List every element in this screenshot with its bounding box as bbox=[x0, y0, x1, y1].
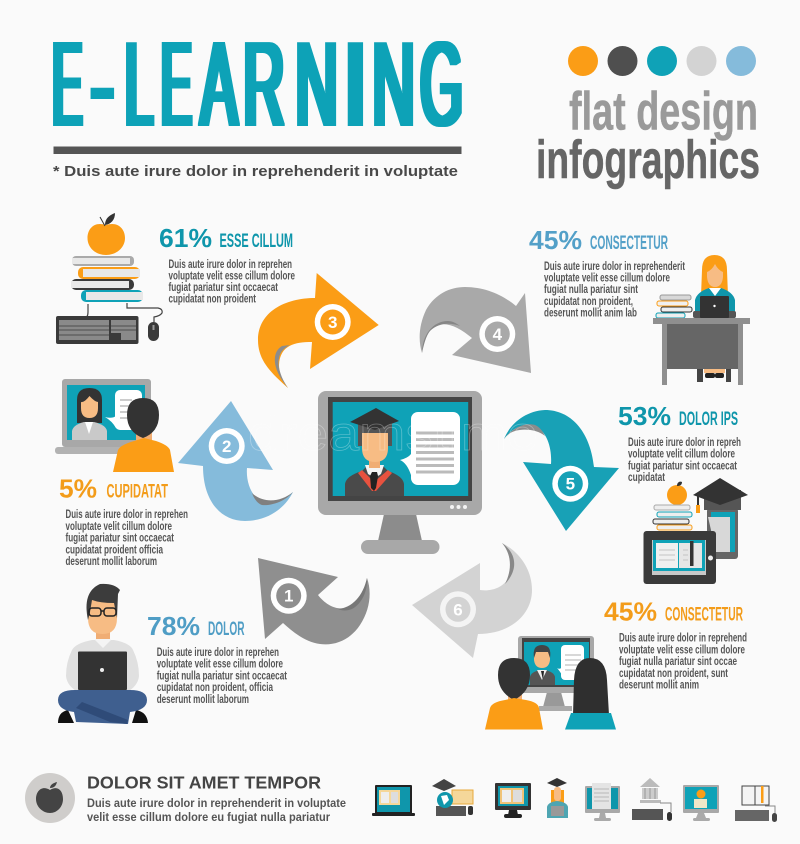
text block: 53% dolor ips: DOLOR IPS bbox=[679, 409, 738, 430]
text block: 53% dolor ips: fugiat pariatur sint occaecat bbox=[628, 458, 737, 472]
text block: 53% dolor ips: voluptate velit cillum dolore bbox=[628, 447, 735, 461]
icon: globe and mortarboard bbox=[432, 779, 473, 816]
arrow 3 bbox=[258, 273, 379, 388]
icon: laptop with book bbox=[372, 785, 415, 816]
text block: 78% dolor: 78% bbox=[147, 611, 200, 641]
text block: 5% cupidatat: Duis aute irure dolor in reprehen bbox=[66, 507, 188, 521]
text block: 61% esse cillum: fugiat pariatur sint occaecat bbox=[168, 280, 278, 294]
footer text: Duis aute irure dolor in reprehenderit in voluptate bbox=[87, 798, 346, 810]
arrow 3: 3 bbox=[328, 313, 337, 332]
footer icon row bbox=[372, 778, 777, 822]
icon: man with laptop bbox=[58, 584, 148, 724]
icon: two students watching a lecture bbox=[485, 636, 616, 730]
text block: 78% dolor: DOLOR bbox=[208, 619, 245, 640]
icon: tablet, books and mortarboard bbox=[644, 478, 748, 584]
text block: 78% dolor: deserunt mollit laborum bbox=[157, 692, 249, 706]
text block: 5% cupidatat: 5% bbox=[59, 474, 97, 504]
text block: 45% consectetur (blue): CONSECTETUR bbox=[590, 233, 668, 254]
arrow 6 bbox=[412, 543, 532, 658]
title: L bbox=[125, 18, 153, 151]
text block: 45% consectetur (orange): 45% bbox=[604, 597, 657, 627]
text block: 61% esse cillum: 61% bbox=[159, 223, 212, 253]
arrow 2: 2 bbox=[222, 437, 231, 456]
text block: 5% cupidatat: deserunt mollit laborum bbox=[66, 554, 157, 568]
icon: monitor with apple and books bbox=[683, 785, 719, 821]
arrow 1 bbox=[258, 558, 370, 644]
text block: 5% cupidatat: cupidatat proident officia bbox=[66, 542, 163, 556]
text block: 45% consectetur (orange): cupidatat non proident, sunt bbox=[619, 666, 728, 680]
text block: 53% dolor ips: Duis aute irure dolor in repreh bbox=[628, 435, 741, 449]
arrow 5: 5 bbox=[566, 475, 575, 494]
title: N bbox=[372, 18, 415, 151]
subtitle: * Duis aute irure dolor in reprehenderit in voluptate bbox=[53, 163, 458, 180]
icon: dark monitor with book bbox=[495, 783, 531, 818]
title: E bbox=[52, 18, 82, 151]
arrow 5 bbox=[504, 410, 619, 531]
text block: 45% consectetur (blue): Duis aute irure dolor in reprehenderit bbox=[544, 259, 685, 273]
graduate figure bbox=[345, 408, 404, 496]
arrow 4: 4 bbox=[493, 325, 503, 344]
text block: 45% consectetur (orange): deserunt mollit anim bbox=[619, 678, 699, 692]
text block: 5% cupidatat: fugiat pariatur sint occaecat bbox=[66, 531, 174, 545]
speech bubble bbox=[400, 412, 460, 485]
text block: 78% dolor: Duis aute irure dolor in reprehen bbox=[157, 645, 279, 659]
text block: 53% dolor ips: 53% bbox=[618, 401, 671, 431]
title: I bbox=[342, 18, 369, 151]
text block: 45% consectetur (blue) bbox=[529, 225, 685, 320]
title: R bbox=[243, 18, 284, 151]
icon: institution and keyboard bbox=[632, 778, 672, 821]
text block: 45% consectetur (blue): 45% bbox=[529, 225, 582, 255]
arrow 4 bbox=[420, 287, 531, 373]
title: N bbox=[295, 18, 338, 151]
text block: 61% esse cillum bbox=[159, 223, 295, 306]
arrow 2 bbox=[178, 401, 293, 521]
title: - bbox=[90, 18, 114, 151]
text block: 53% dolor ips bbox=[618, 401, 741, 484]
title: E bbox=[161, 18, 192, 151]
text block: 45% consectetur (blue): deserunt mollit anim lab bbox=[544, 306, 637, 320]
text block: 45% consectetur (blue): cupidatat non proident, bbox=[544, 294, 633, 308]
text block: 45% consectetur (orange) bbox=[604, 597, 747, 692]
central monitor with graduate bbox=[318, 391, 482, 554]
colour palette dots bbox=[568, 46, 756, 76]
arrow 1: 1 bbox=[284, 587, 293, 606]
infographic canvas: G bbox=[420, 18, 463, 151]
text block: 45% consectetur (blue): voluptate velit esse cillum dolore bbox=[544, 271, 670, 285]
icon: book and keyboard bbox=[735, 786, 777, 822]
icon: video call on laptop bbox=[55, 379, 174, 472]
icon: books, apple and keyboard bbox=[56, 213, 162, 344]
text block: 78% dolor bbox=[147, 611, 287, 706]
text block: 78% dolor: cupidatat non proident, officia bbox=[157, 680, 273, 694]
footer text: DOLOR SIT AMET TEMPOR bbox=[87, 773, 321, 793]
text block: 5% cupidatat bbox=[59, 474, 188, 568]
small book stack bbox=[656, 295, 692, 318]
icon: graduate woman bbox=[547, 778, 568, 818]
text block: 61% esse cillum: cupidatat non proident bbox=[168, 292, 256, 306]
title: A bbox=[201, 18, 237, 151]
text block: 78% dolor: fugiat nulla pariatur sint occaecat bbox=[157, 668, 287, 682]
icon: woman at desk bbox=[653, 255, 750, 385]
heading: flat design infographics bbox=[536, 82, 760, 190]
footer text bbox=[87, 773, 346, 824]
text block: 78% dolor: voluptate velit esse cillum dolore bbox=[157, 657, 283, 671]
text block: 61% esse cillum: ESSE CILLUM bbox=[220, 231, 293, 252]
icon: monitor with document bbox=[585, 783, 620, 821]
text block: 61% esse cillum: voluptate velit esse cillum dolore bbox=[168, 268, 295, 282]
footer: apple badge bbox=[25, 773, 75, 823]
footer text: velit esse cillum dolore eu fugiat nulla pariatur bbox=[87, 812, 331, 824]
text block: 45% consectetur (blue): fugiat nulla pariatur sint bbox=[544, 282, 638, 296]
text block: 61% esse cillum: Duis aute irure dolor in reprehen bbox=[168, 257, 292, 271]
watermark: dreamstime bbox=[248, 408, 538, 461]
text block: 45% consectetur (orange): fugiat nulla pariatur sint occae bbox=[619, 654, 737, 668]
text block: 5% cupidatat: voluptate velit cillum dolore bbox=[66, 519, 172, 533]
arrow 6: 6 bbox=[453, 600, 463, 619]
text block: 53% dolor ips: cupidatat bbox=[628, 470, 665, 484]
text block: 5% cupidatat: CUPIDATAT bbox=[106, 482, 168, 502]
